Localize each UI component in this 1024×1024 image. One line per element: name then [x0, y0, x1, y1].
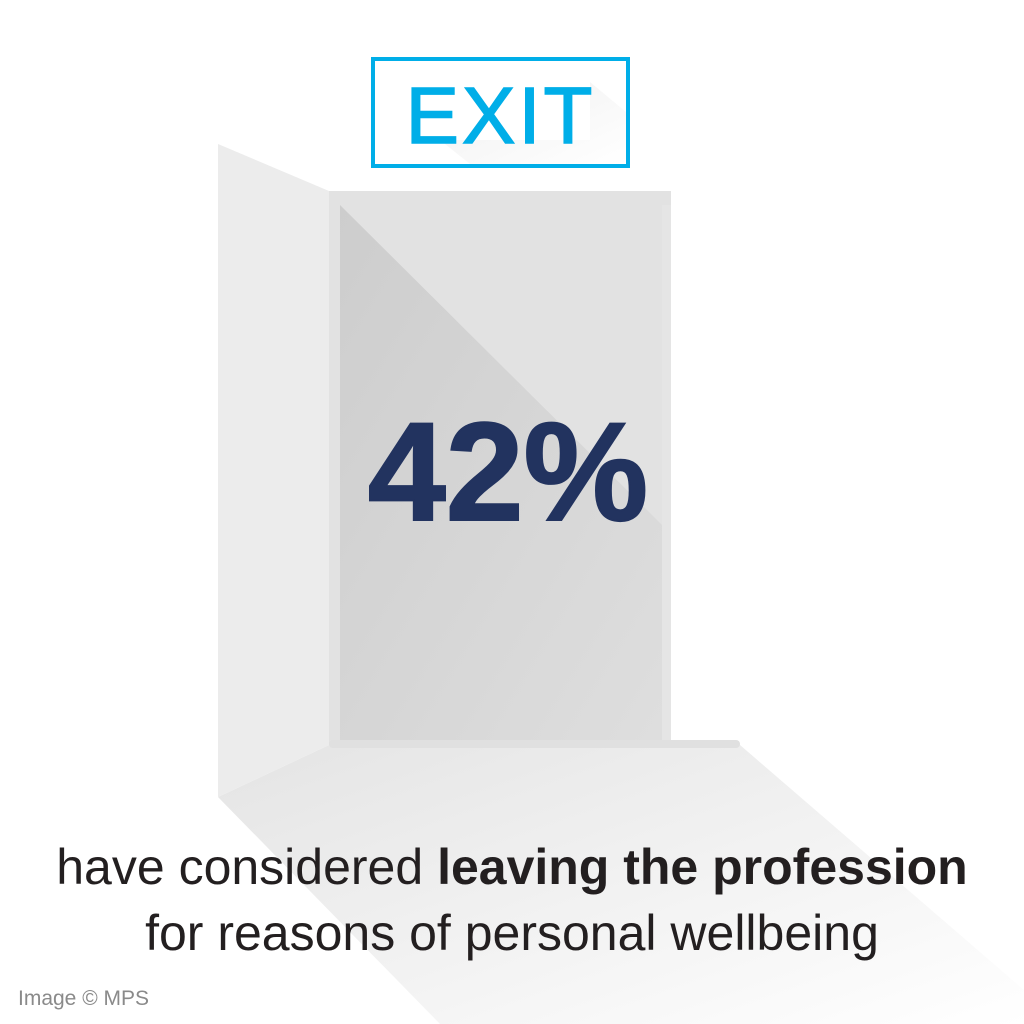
caption: for reasons of personal wellbeing — [145, 905, 879, 961]
exit sign shadow — [440, 82, 626, 164]
caption: have considered leaving the profession — [56, 839, 968, 895]
door sill — [329, 740, 740, 748]
left wall — [218, 144, 329, 797]
door frame — [329, 191, 671, 745]
caption — [56, 839, 968, 961]
floor shadow — [218, 745, 1024, 1024]
exit sign: EXIT — [406, 71, 595, 160]
exit sign — [371, 57, 630, 168]
credit: Image © MPS — [18, 987, 149, 1010]
statistic 42%: 42% — [368, 393, 648, 550]
